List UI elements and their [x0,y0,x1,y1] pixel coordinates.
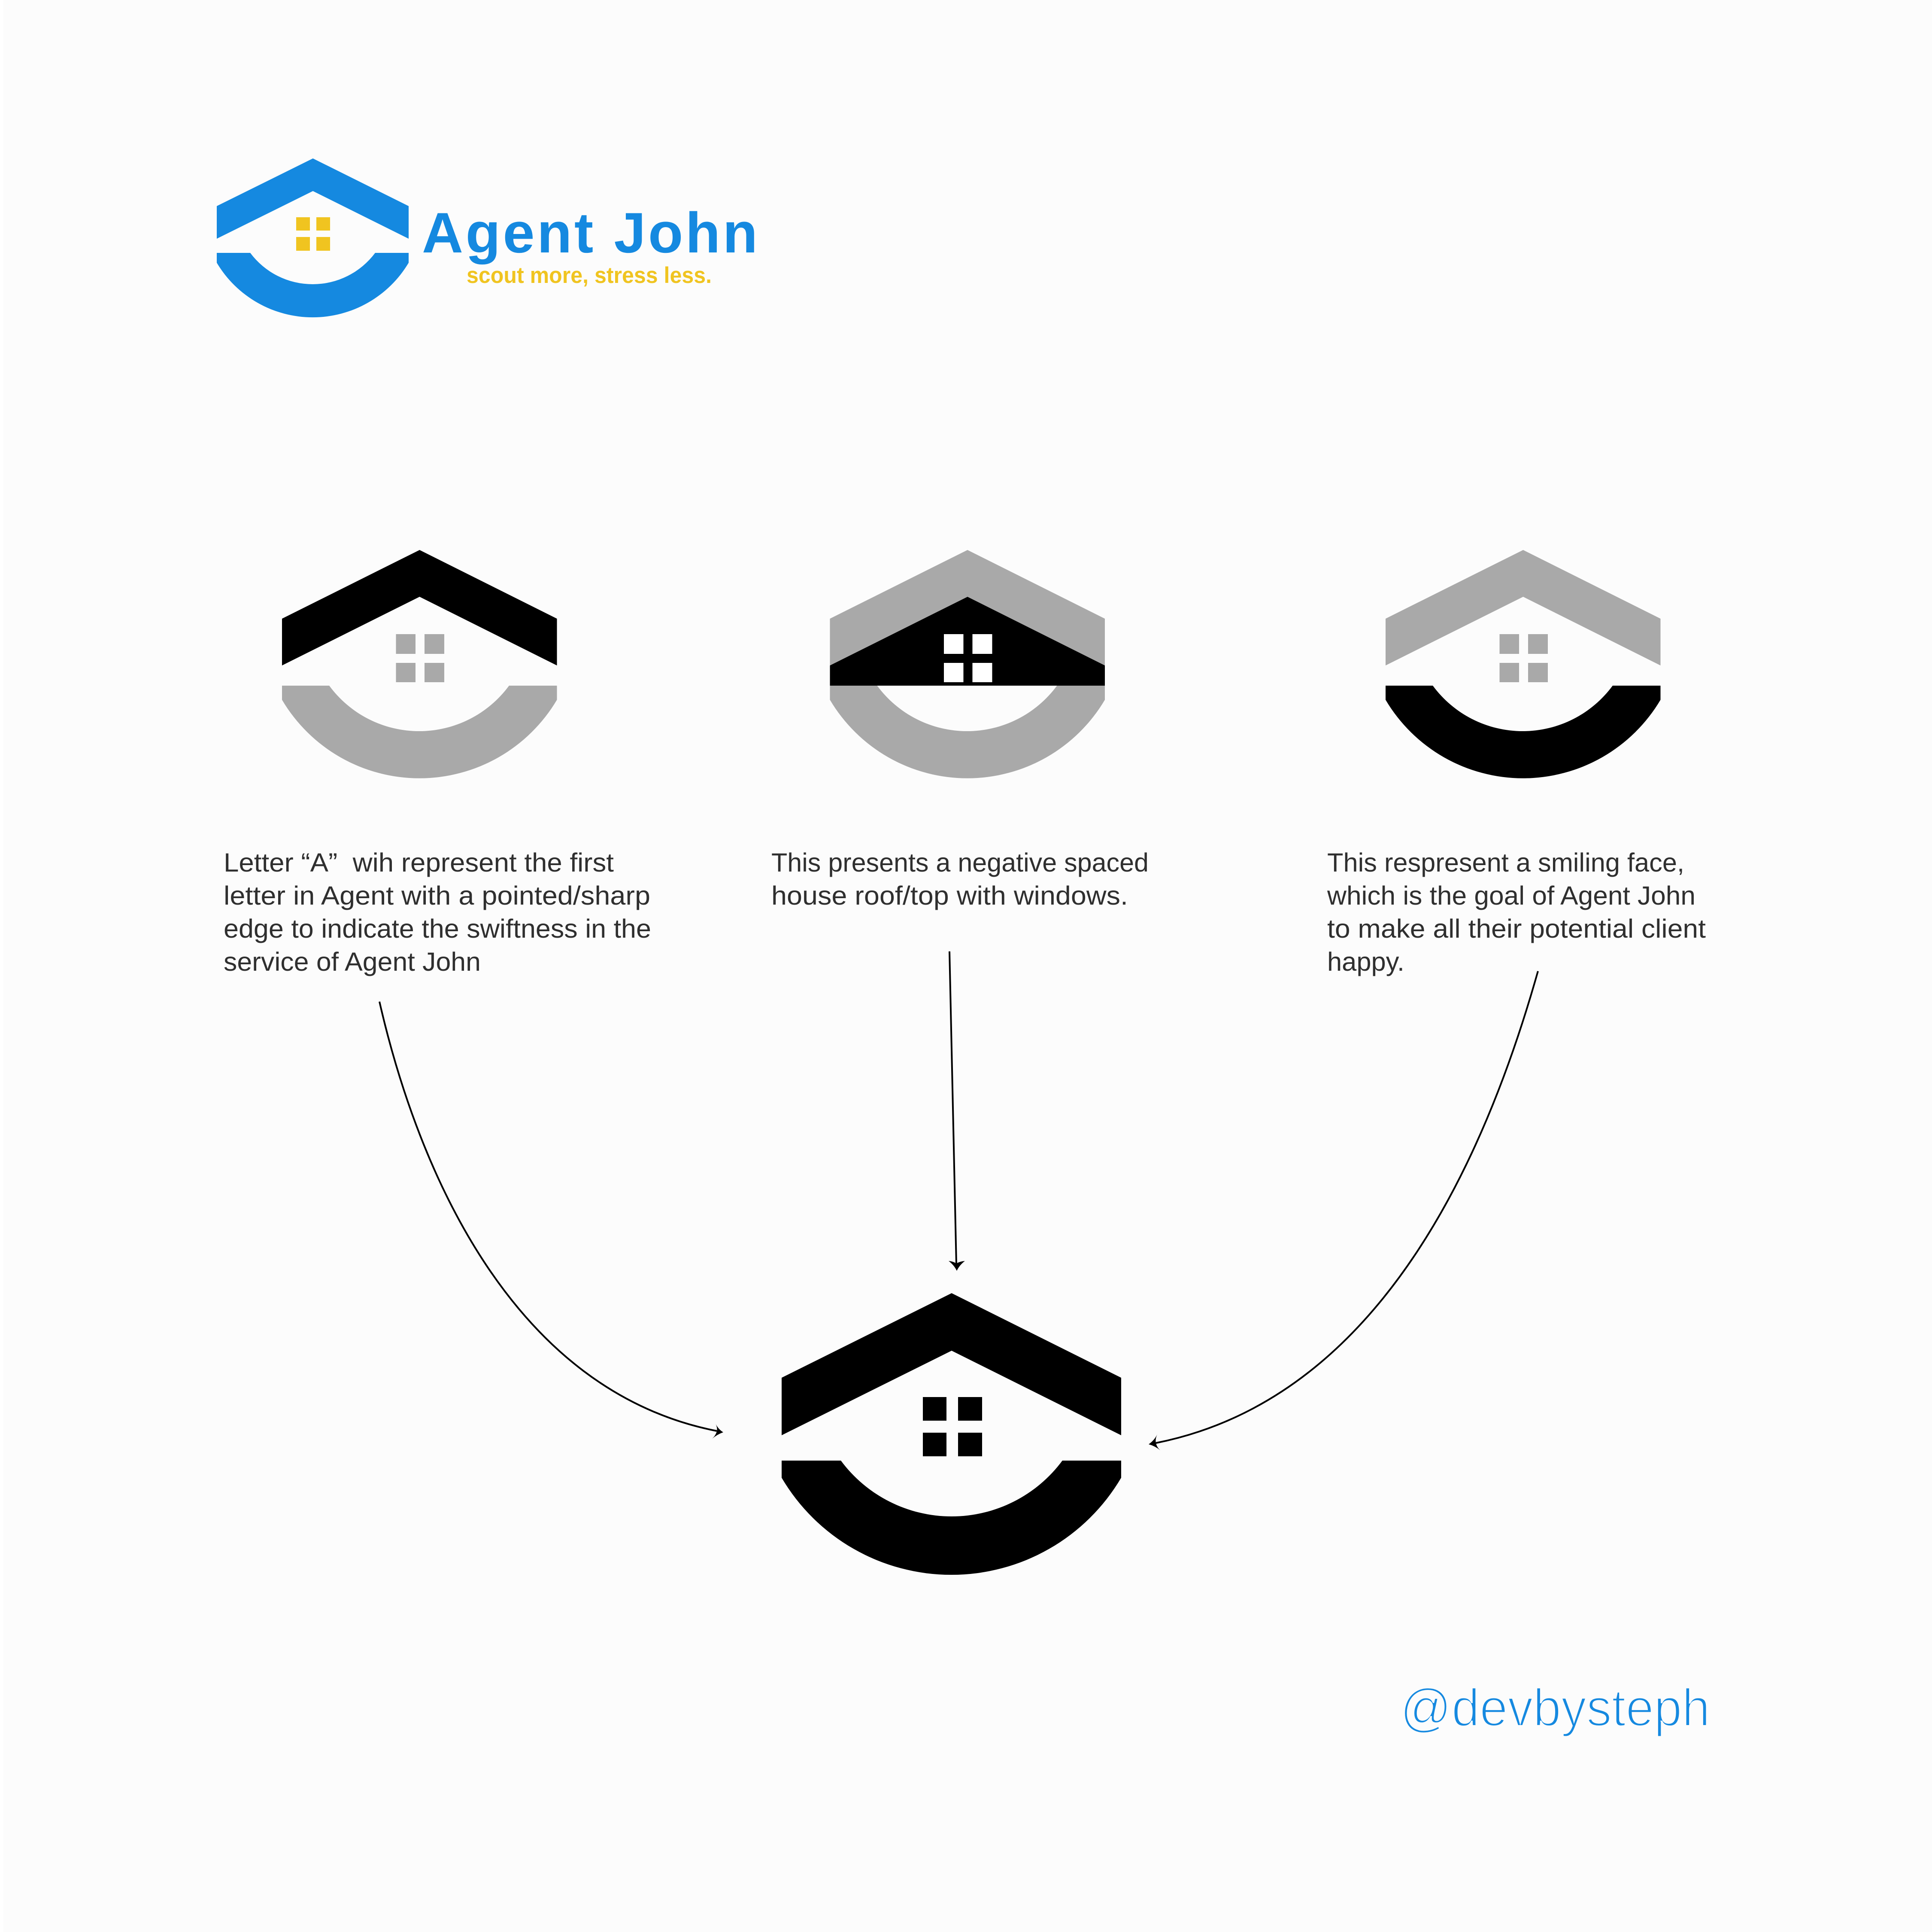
text block: smiling face explanation: which is the goal of Agent John [1327,881,1695,910]
icon: blue house logo [217,158,409,317]
text block: house roof explanation [771,848,1149,910]
text block: letter A explanation: Letter “A” wih represent the first [224,848,614,877]
text block: smiling face explanation: happy. [1327,947,1404,976]
text block: letter A explanation [224,848,651,976]
text block: smiling face explanation [1327,848,1706,976]
arrow: middle explanation to final logo [949,951,965,1271]
text block: smiling face explanation: This respresent a smiling face, [1327,848,1684,877]
arrow: left explanation to final logo [379,1002,723,1439]
text block: letter A explanation: letter in Agent with a pointed/sharp [224,881,650,910]
text block: house roof explanation: house roof/top with windows. [771,881,1128,910]
credit handle: @devbysteph [1400,1679,1710,1738]
text block: smiling face explanation: to make all their potential client [1327,914,1706,943]
icon: smiling face highlighted [1386,550,1660,778]
icon: letter A highlighted [282,550,557,778]
text block: house roof explanation: This presents a negative spaced [771,848,1149,877]
brand logo [217,158,758,317]
arrow: right explanation to final logo [1149,971,1538,1450]
brand name: Agent John [422,201,758,265]
icon: final combined logo [782,1293,1121,1575]
text block: letter A explanation: edge to indicate the swiftness in the [224,914,651,943]
text block: letter A explanation: service of Agent John [224,947,481,976]
icon: negative space house highlighted [830,550,1105,778]
tagline: scout more, stress less. [467,263,712,288]
